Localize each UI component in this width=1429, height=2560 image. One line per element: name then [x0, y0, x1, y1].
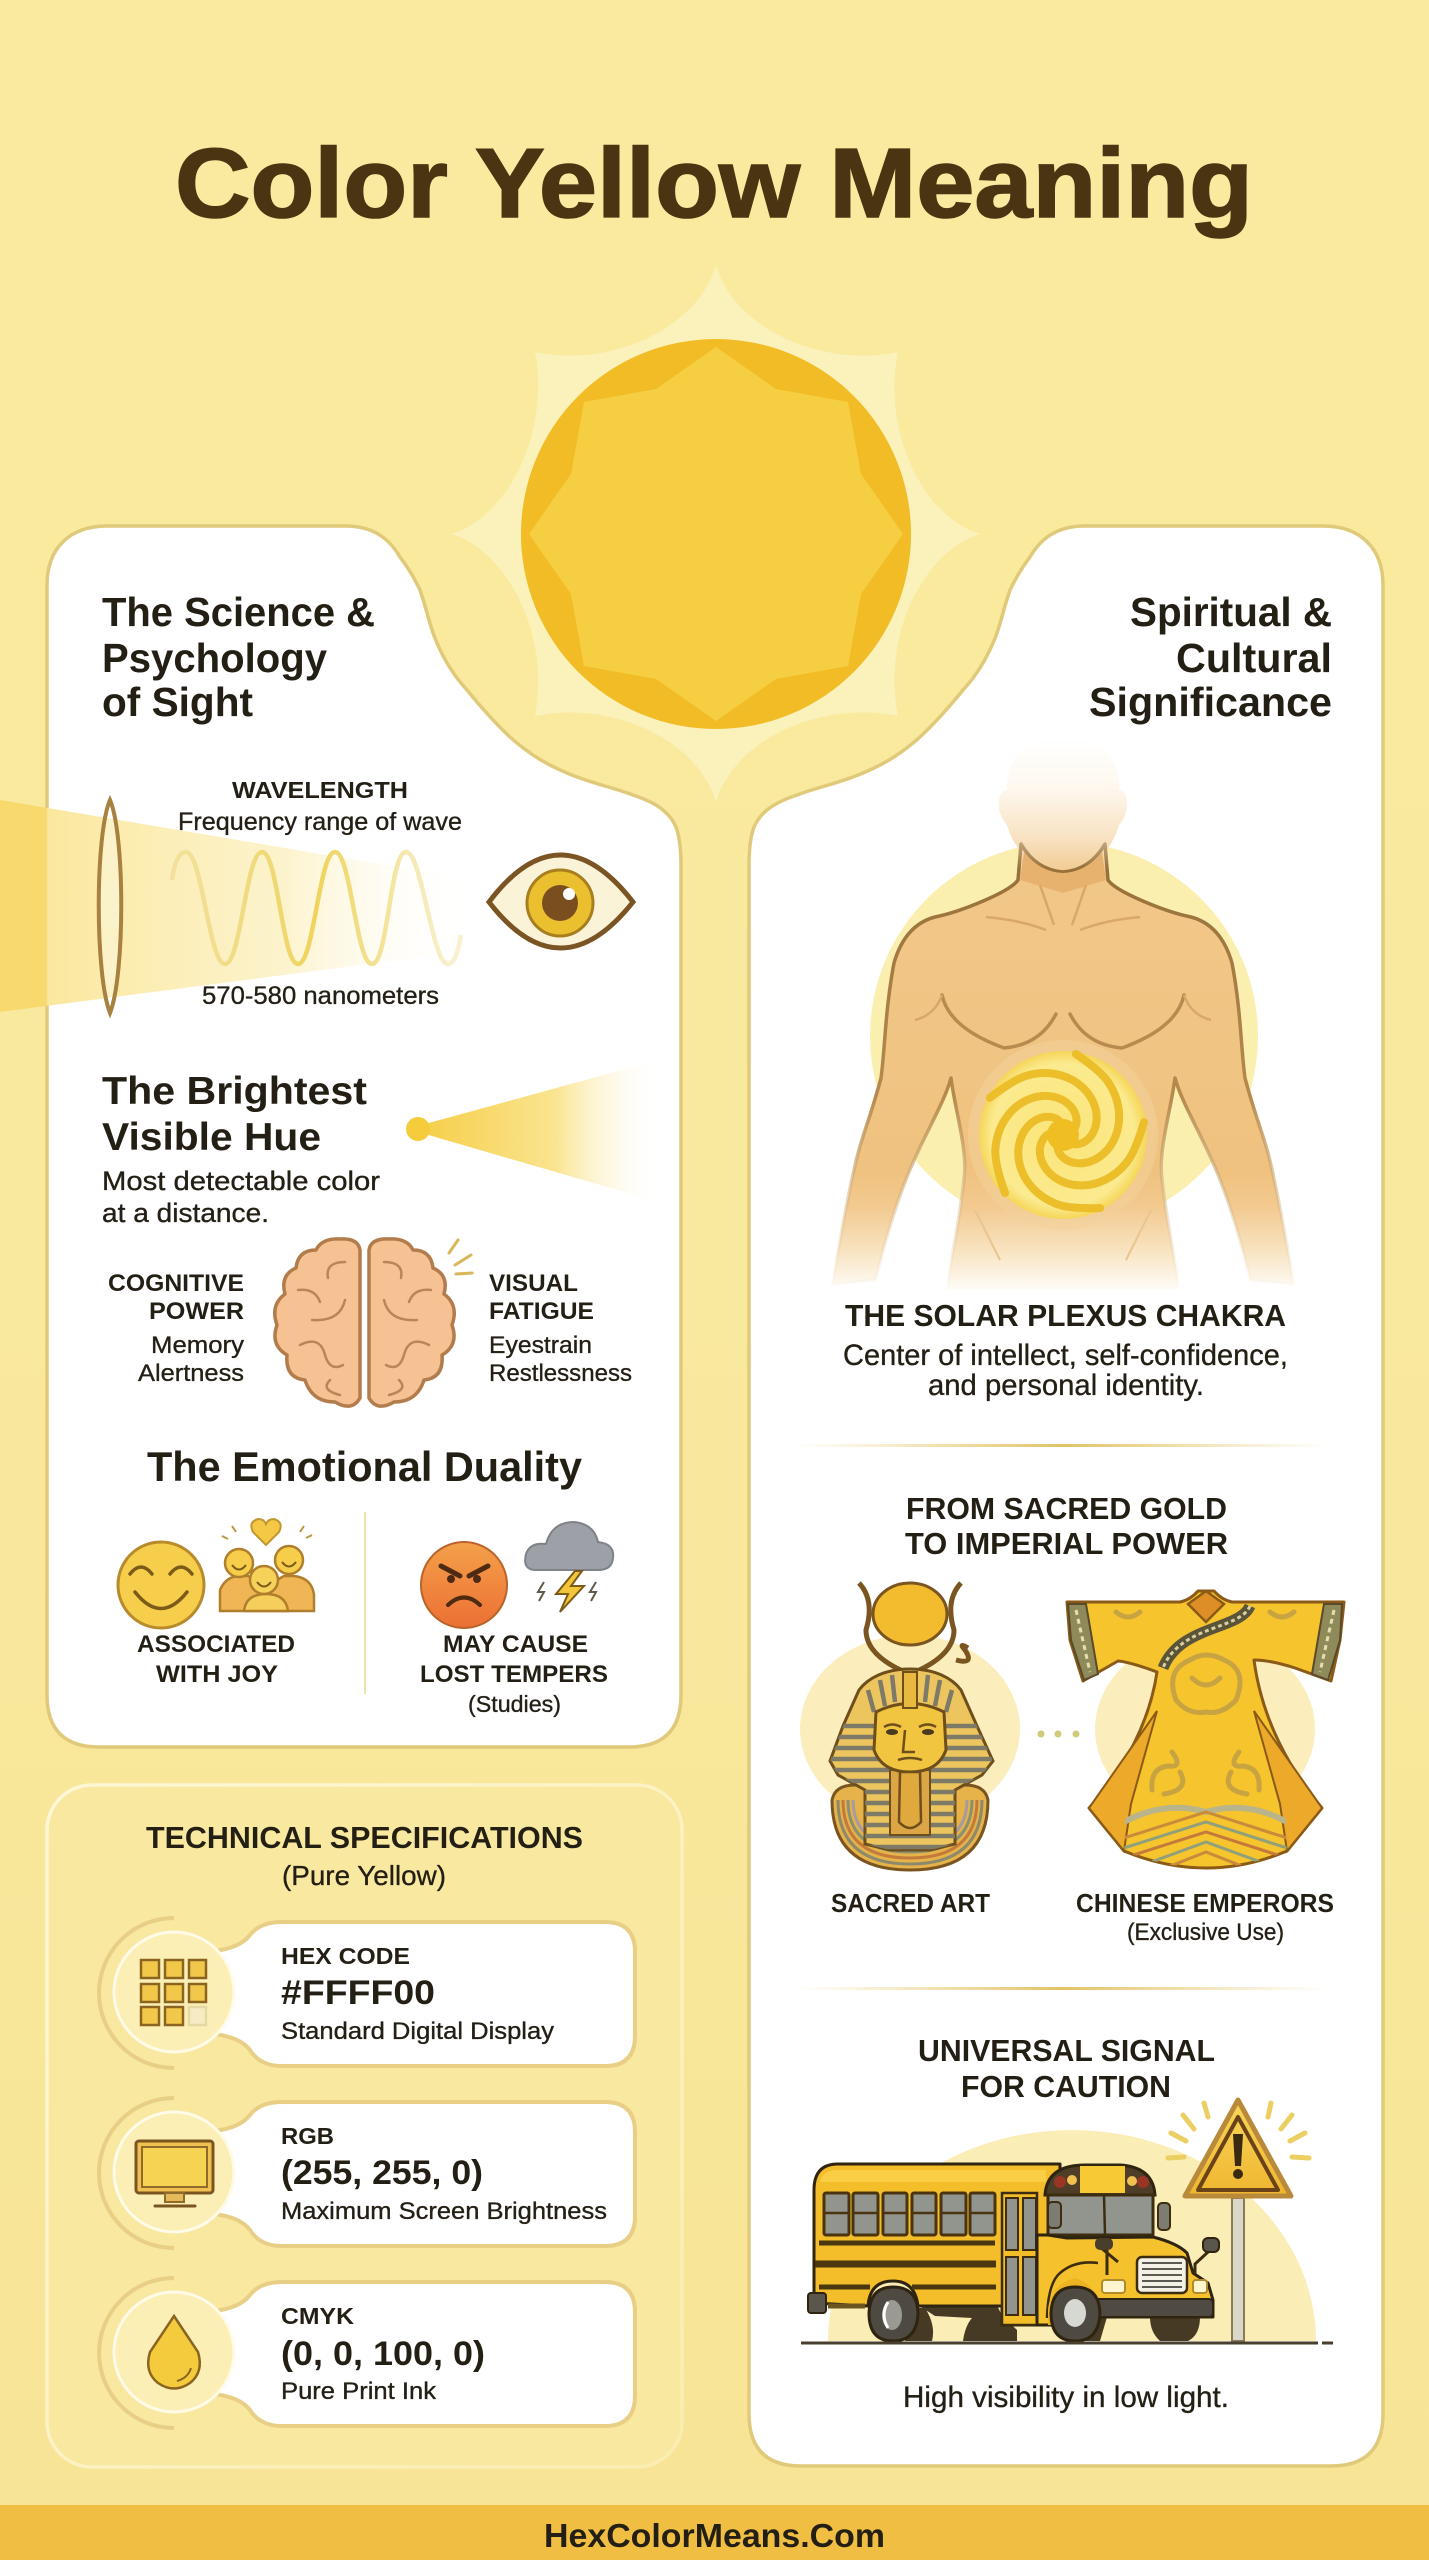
caution caption: High visibility in low light.: [903, 2381, 1229, 2414]
visual fatigue text: [489, 1270, 632, 1387]
solar plexus chakra text: THE SOLAR PLEXUS CHAKRA: [845, 1298, 1286, 1333]
technical specifications heading: (Pure Yellow): [282, 1860, 446, 1891]
cmyk text: (0, 0, 100, 0): [281, 2335, 485, 2373]
technical specifications heading: [146, 1820, 583, 1891]
hex text: #FFFF00: [281, 1974, 435, 2012]
heading: science and psychology of sight: The Science &: [102, 589, 375, 635]
icon: light cone: [406, 1059, 662, 1203]
lower dark chassis: [905, 2305, 1200, 2341]
lost tempers label: MAY CAUSE: [443, 1631, 588, 1658]
lost tempers label: (Studies): [468, 1691, 561, 1717]
brightest hue heading: The Brightest: [102, 1070, 367, 1113]
icon: monitor: [136, 2141, 213, 2206]
wave: [172, 852, 461, 964]
icon: imperial robe: [1067, 1591, 1344, 1874]
chinese emperors label: [1076, 1888, 1334, 1946]
solar plexus chakra text: Center of intellect, self-confidence,: [843, 1339, 1288, 1372]
connector dots: [1038, 1730, 1080, 1738]
footer bar: [0, 2505, 1429, 2560]
solar plexus chakra text: and personal identity.: [928, 1369, 1204, 1402]
emotional duality heading: The Emotional Duality: [147, 1443, 583, 1490]
spec row: rgb: [99, 2098, 635, 2248]
rgb text: (255, 255, 0): [281, 2154, 483, 2192]
solar plexus chakra text: [843, 1298, 1288, 1402]
caution heading: FOR CAUTION: [961, 2069, 1171, 2104]
lost tempers label: LOST TEMPERS: [420, 1661, 608, 1688]
halo behind bus: [828, 2130, 1316, 2341]
cognitive power text: Alertness: [138, 1360, 244, 1387]
title: Color Yellow Meaning: [175, 128, 1253, 238]
panel: spiritual and cultural: [749, 526, 1383, 2466]
caution heading: [918, 2033, 1215, 2104]
light beam: [0, 800, 475, 1012]
heading: spiritual and cultural significance: Spiritual &: [1130, 589, 1332, 635]
footer text: HexColorMeans.Com: [544, 2517, 885, 2554]
chakra spiral: [968, 1040, 1158, 1230]
nanometers label: 570-580 nanometers: [202, 982, 439, 1010]
brightest hue description: [102, 1166, 380, 1228]
heading: spiritual and cultural significance: [1089, 589, 1332, 725]
emotional divider: [364, 1512, 366, 1694]
sacred art label: SACRED ART: [831, 1888, 990, 1918]
rgb text: RGB: [281, 2123, 334, 2149]
icon: brain: [275, 1239, 472, 1406]
sacred gold heading: FROM SACRED GOLD: [906, 1491, 1227, 1526]
heading: spiritual and cultural significance: Significance: [1089, 679, 1332, 725]
heading: science and psychology of sight: Psychology: [102, 635, 327, 681]
wavelength text: [178, 777, 462, 836]
icon: lens: [99, 800, 121, 1013]
visual fatigue text: VISUAL: [489, 1270, 578, 1297]
icon: color grid: [141, 1960, 206, 2025]
hex text: [281, 1943, 554, 2045]
wavelength text: Frequency range of wave: [178, 808, 462, 836]
cmyk text: [281, 2303, 485, 2405]
visual fatigue text: FATIGUE: [489, 1298, 594, 1325]
sacred gold heading: TO IMPERIAL POWER: [905, 1526, 1228, 1561]
cognitive power text: COGNITIVE: [108, 1270, 244, 1297]
icon: ink drop: [148, 2316, 200, 2388]
joy label: [137, 1631, 295, 1688]
spec row: cmyk: [99, 2278, 635, 2428]
icon: school bus: [808, 2164, 1219, 2341]
caution heading: UNIVERSAL SIGNAL: [918, 2033, 1215, 2068]
icon: eye: [489, 855, 633, 948]
chinese emperors label: CHINESE EMPERORS: [1076, 1888, 1334, 1918]
heading: science and psychology of sight: of Sight: [102, 679, 253, 725]
cognitive power text: Memory: [151, 1332, 244, 1359]
cmyk text: CMYK: [281, 2303, 354, 2329]
icon: angry face: [421, 1542, 507, 1628]
brightest hue description: Most detectable color: [102, 1166, 380, 1196]
technical specifications heading: TECHNICAL SPECIFICATIONS: [146, 1820, 583, 1855]
joy label: ASSOCIATED: [137, 1631, 295, 1658]
icon: pharaoh: [800, 1583, 1020, 1870]
icon: sun: [451, 265, 980, 802]
sacred gold heading: [905, 1491, 1228, 1561]
panel: science and psychology: [47, 526, 681, 1747]
icon: warning sign: [1168, 2100, 1309, 2341]
cognitive power text: POWER: [149, 1298, 244, 1325]
spec row: hex code: [99, 1918, 635, 2068]
visual fatigue text: Restlessness: [489, 1360, 632, 1387]
visual fatigue text: Eyestrain: [489, 1332, 592, 1359]
joy label: WITH JOY: [156, 1661, 278, 1688]
brightest hue heading: [102, 1070, 367, 1159]
wavelength text: WAVELENGTH: [232, 777, 408, 803]
hex text: Standard Digital Display: [281, 2018, 554, 2045]
icon: smiling face: [118, 1542, 204, 1628]
rgb text: [281, 2123, 607, 2225]
rgb text: Maximum Screen Brightness: [281, 2198, 607, 2225]
heading: science and psychology of sight: [102, 589, 375, 725]
heading: spiritual and cultural significance: Cultural: [1176, 635, 1332, 681]
cmyk text: Pure Print Ink: [281, 2378, 437, 2405]
lost tempers label: [420, 1631, 608, 1717]
chinese emperors label: (Exclusive Use): [1127, 1919, 1284, 1946]
brightest hue description: at a distance.: [102, 1198, 269, 1228]
brightest hue heading: Visible Hue: [102, 1116, 321, 1159]
cognitive power text: [108, 1270, 244, 1387]
ground line: [801, 2342, 1333, 2344]
hex text: HEX CODE: [281, 1943, 410, 1969]
icon: human body with solar plexus chakra: [832, 738, 1294, 1289]
panel: technical specifications: [47, 1785, 682, 2467]
icon: happy family: [220, 1519, 314, 1611]
icon: storm cloud: [525, 1522, 613, 1612]
